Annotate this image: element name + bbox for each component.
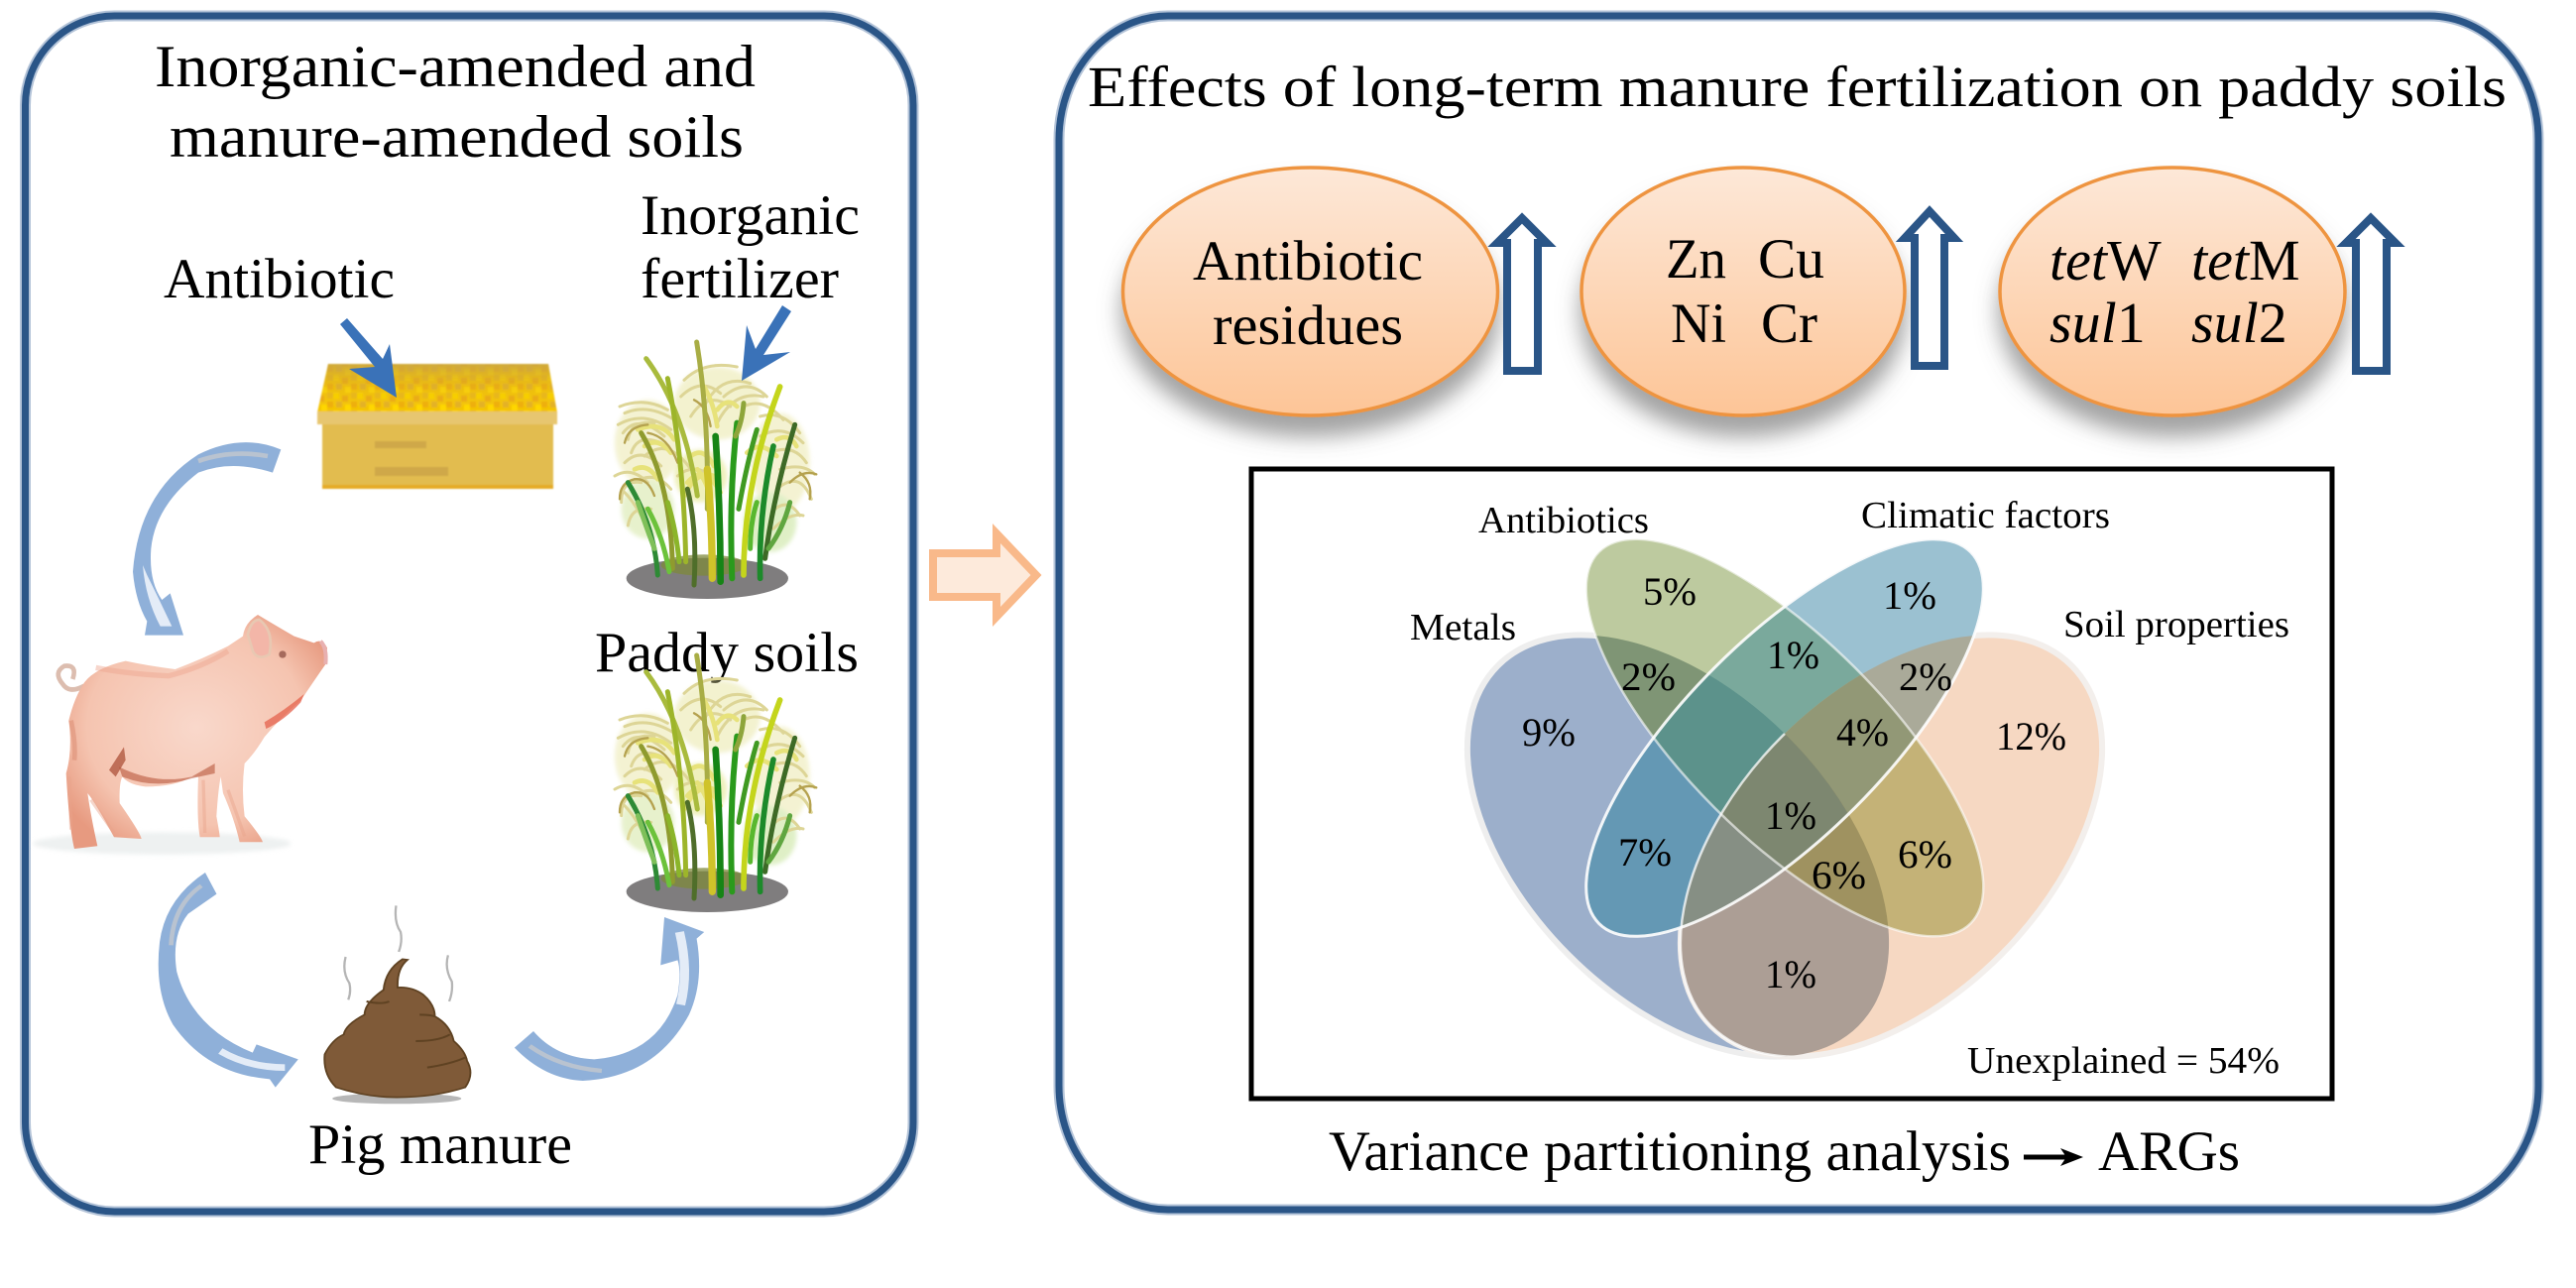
venn percentages: 7% — [1618, 830, 1672, 875]
icon: pig manure — [324, 905, 470, 1104]
label: antibiotic: Antibiotic — [164, 248, 395, 310]
venn label: soil properties: Soil properties — [2063, 604, 2289, 645]
arrow: pig to manure — [159, 873, 298, 1088]
venn percentages — [1522, 569, 2066, 996]
oval: metals: Cr — [1761, 293, 1817, 355]
caption: variance partitioning analysis to ARGs: ARGs — [2098, 1120, 2240, 1183]
venn percentages: 1% — [1765, 952, 1816, 996]
arrow: metals increase — [1905, 211, 1954, 366]
venn percentages: 1% — [1765, 793, 1816, 838]
oval: resistance genes: sul2 — [2191, 291, 2287, 355]
arrow: manure to paddy soil — [515, 917, 704, 1081]
arrow: left panel to right panel — [933, 533, 1036, 617]
oval: antibiotic residues: residues — [1213, 294, 1403, 357]
venn percentages: 9% — [1522, 710, 1576, 755]
venn label: metals: Metals — [1410, 607, 1516, 648]
heading: left panel title — [155, 34, 756, 170]
oval: metals — [1581, 168, 1905, 415]
oval: resistance genes — [2000, 168, 2345, 415]
chart box: variance partitioning venn diagram — [1251, 469, 2332, 1135]
label: paddy soils: Paddy soils — [595, 622, 859, 684]
label: inorganic fertilizer: Inorganic — [641, 184, 860, 247]
caption: variance partitioning analysis to ARGs: Variance partitioning analysis — [1329, 1120, 2011, 1183]
oval: antibiotic residues — [1122, 168, 1497, 415]
venn percentages: 6% — [1898, 832, 1952, 877]
oval: resistance genes: tetW — [2049, 228, 2162, 293]
oval: resistance genes: sul1 — [2049, 291, 2146, 355]
panel: effects of long-term manure fertilization — [1059, 16, 2538, 1210]
icon: rice plant top — [615, 342, 816, 599]
arrow: resistance genes increase — [2346, 218, 2396, 371]
heading: left panel title: manure-amended soils — [170, 104, 744, 170]
venn diagram — [1464, 539, 2105, 1059]
venn percentages: 6% — [1812, 853, 1866, 897]
venn label: antibiotics: Antibiotics — [1478, 500, 1649, 541]
oval: metals: Zn — [1666, 228, 1726, 291]
arrow: feed to pig — [133, 442, 281, 636]
oval: metals: Ni — [1671, 293, 1726, 355]
note: unexplained variance: Unexplained = 54% — [1967, 1040, 2280, 1082]
heading: left panel title: Inorganic-amended and — [155, 34, 756, 99]
venn percentages: 2% — [1899, 654, 1952, 699]
arrow: fertilizer into rice — [742, 305, 791, 381]
oval: antibiotic residues: Antibiotic — [1193, 230, 1423, 293]
venn percentages: 2% — [1621, 654, 1676, 699]
arrow: antibiotic residues increase — [1497, 218, 1547, 371]
venn percentages: 1% — [1767, 633, 1819, 677]
oval: metals: Cu — [1758, 228, 1824, 291]
label: pig manure: Pig manure — [308, 1113, 572, 1176]
oval: resistance genes: tetM — [2191, 228, 2300, 293]
venn percentages: 1% — [1883, 573, 1936, 618]
venn percentages: 12% — [1996, 714, 2066, 759]
venn percentages: 4% — [1836, 710, 1889, 755]
venn percentages: 5% — [1643, 569, 1697, 614]
label: inorganic fertilizer — [641, 184, 860, 310]
arrow: antibiotic into feed — [340, 318, 397, 398]
panel: inorganic-amended and manure-amended soils — [26, 16, 913, 1212]
icon: pig — [33, 615, 327, 855]
label: inorganic fertilizer: fertilizer — [641, 248, 839, 310]
venn label: climatic factors: Climatic factors — [1861, 495, 2110, 536]
icon: rice plant bottom — [615, 655, 816, 912]
heading: right panel title: Effects of long-term manure fertilization on paddy soils — [1088, 55, 2507, 119]
icon: feed trough — [317, 364, 557, 489]
